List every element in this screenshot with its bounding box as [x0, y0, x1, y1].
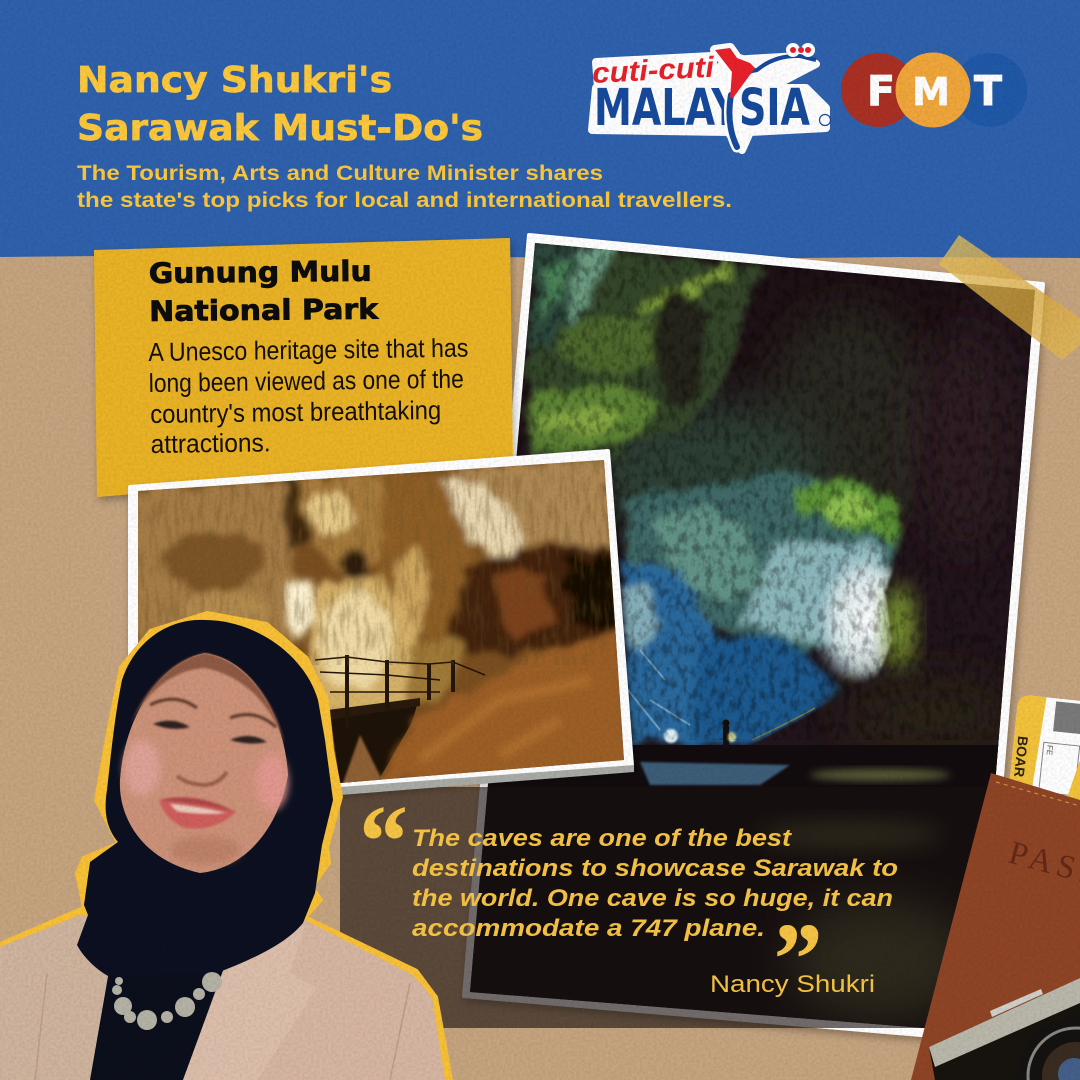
logo: FMT — [841, 52, 1027, 128]
logo: FMT: T — [974, 67, 1002, 115]
title — [77, 60, 483, 149]
body text — [148, 333, 470, 459]
closing quote mark: ” — [768, 902, 820, 1017]
quote: accommodate a 747 plane. — [412, 915, 765, 942]
photo: golden cave with white frame — [120, 450, 640, 810]
body text: attractions. — [150, 427, 271, 459]
quote: The caves are one of the best — [412, 825, 792, 852]
photo: Mulu cave with white frame — [460, 230, 1060, 1050]
translucent quote band — [340, 787, 985, 1028]
body text: A Unesco heritage site that has — [148, 333, 469, 367]
sticky note heading panel — [94, 238, 513, 497]
subtitle — [77, 162, 732, 212]
passport — [911, 773, 1080, 1080]
attribution: Nancy Shukri — [710, 971, 875, 998]
logo: FMT: F — [867, 67, 895, 115]
quote text block — [354, 784, 898, 1017]
heading: Gunung Mulu National Park: National Park — [149, 293, 380, 328]
boarding pass — [1007, 694, 1080, 815]
boarding pass: FE — [1045, 745, 1055, 756]
boarding pass: BOAR — [1011, 735, 1031, 778]
quote — [412, 825, 898, 942]
body text: country's most breathtaking — [150, 395, 441, 429]
logo: Cuti-Cuti Malaysia: MALAYSIA — [594, 79, 810, 138]
title: Sarawak Must-Do's — [77, 108, 483, 149]
heading: Gunung Mulu National Park — [149, 255, 380, 328]
subtitle: the state's top picks for local and international travellers. — [77, 189, 732, 212]
heading: Gunung Mulu National Park: Gunung Mulu — [149, 255, 372, 290]
quote: the world. One cave is so huge, it can — [412, 885, 893, 912]
quote: destinations to showcase Sarawak to — [412, 855, 898, 882]
header band — [0, 0, 1080, 259]
opening quote mark: “ — [354, 784, 406, 899]
logo: Cuti-Cuti Malaysia: cuti-cuti — [591, 52, 716, 90]
title: Nancy Shukri's — [77, 60, 392, 101]
camera — [929, 978, 1080, 1080]
portrait: Nancy Shukri — [0, 612, 452, 1080]
subtitle: The Tourism, Arts and Culture Minister shares — [77, 162, 603, 185]
tape strip — [939, 235, 1080, 360]
logo: Cuti-Cuti Malaysia — [591, 43, 830, 150]
body text: long been viewed as one of the — [149, 364, 464, 398]
logo: FMT: M — [912, 70, 950, 114]
